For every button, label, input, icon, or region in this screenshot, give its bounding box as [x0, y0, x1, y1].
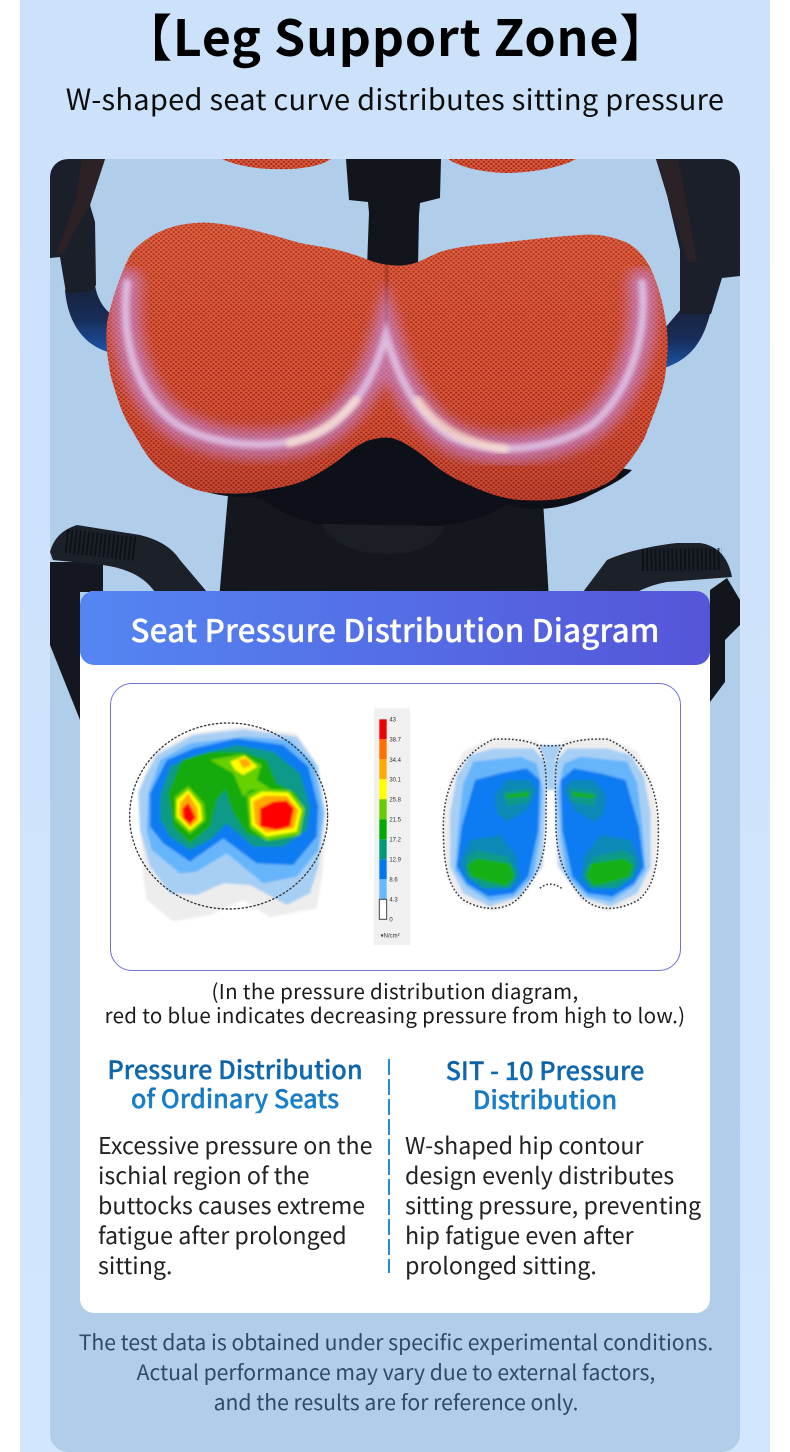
right column heading: SIT - 10 Pressure	[446, 1052, 644, 1088]
disclaimer: Actual performance may vary due to external factors,	[137, 1356, 655, 1387]
chair back stem	[346, 159, 441, 268]
left column body: sitting.	[98, 1247, 172, 1281]
seat column	[219, 495, 549, 600]
heat map: SIT-10 seat	[442, 737, 659, 912]
left caster pedal	[50, 525, 207, 720]
disclaimer: and the results are for reference only.	[214, 1386, 578, 1417]
seat base	[207, 438, 632, 509]
pressure color legend: 34.4	[389, 758, 402, 764]
pressure color legend: 0	[389, 917, 393, 923]
right column body	[405, 1127, 701, 1281]
pressure color legend: 8.6	[389, 877, 398, 883]
disclaimer: The test data is obtained under specific experimental conditions.	[79, 1326, 713, 1357]
left armrest	[50, 159, 112, 352]
left column body	[98, 1127, 373, 1281]
subtitle: W-shaped seat curve distributes sitting pressure	[66, 77, 724, 119]
pressure color legend	[374, 708, 410, 945]
right caster pedal	[583, 543, 740, 702]
pressure color legend: 30.1	[389, 778, 402, 784]
right column heading: Distribution	[473, 1081, 617, 1117]
left column body: Excessive pressure on the	[98, 1127, 373, 1161]
disclaimer	[79, 1326, 713, 1417]
right column body: prolonged sitting.	[405, 1247, 597, 1281]
card header	[80, 591, 710, 665]
right column heading	[400, 1056, 690, 1114]
left column body: fatigue after prolonged	[98, 1217, 347, 1251]
left column heading: of Ordinary Seats	[131, 1080, 339, 1116]
headrest fragments	[222, 159, 576, 173]
diagram note: red to blue indicates decreasing pressure from high to low.)	[105, 999, 685, 1029]
pressure color legend: 12.9	[389, 858, 402, 864]
pressure color legend: 43	[389, 718, 397, 724]
title: 【Leg Support Zone】	[122, 0, 670, 71]
diagram note	[105, 975, 685, 1029]
diagram note: (In the pressure distribution diagram,	[212, 975, 578, 1005]
left column body: ischial region of the	[98, 1157, 310, 1191]
right column body: sitting pressure, preventing	[405, 1187, 701, 1221]
pressure color legend: 4.3	[389, 897, 398, 903]
pressure color legend: 21.5	[389, 818, 402, 824]
photo: seat cushion on chair	[50, 159, 740, 1452]
heat map: ordinary seat	[130, 723, 328, 922]
pressure color legend: 17.2	[389, 838, 402, 844]
pressure color legend: ▾N/cm²	[381, 933, 400, 939]
diagram frame	[110, 683, 681, 971]
right column body: W-shaped hip contour	[405, 1127, 644, 1161]
left column heading	[90, 1055, 380, 1113]
right armrest	[656, 159, 740, 368]
pressure color legend: 38.7	[389, 738, 402, 744]
pressure color legend: 25.8	[389, 798, 402, 804]
right column body: design evenly distributes	[405, 1157, 674, 1191]
left column heading: Pressure Distribution	[107, 1051, 363, 1087]
card heading: Seat Pressure Distribution Diagram	[130, 606, 660, 652]
left column body: buttocks causes extreme	[98, 1187, 365, 1221]
seat cushion	[106, 223, 668, 500]
right column body: hip fatigue even after	[405, 1217, 634, 1251]
panel: seat pressure card	[80, 591, 710, 1313]
divider	[388, 1059, 390, 1273]
